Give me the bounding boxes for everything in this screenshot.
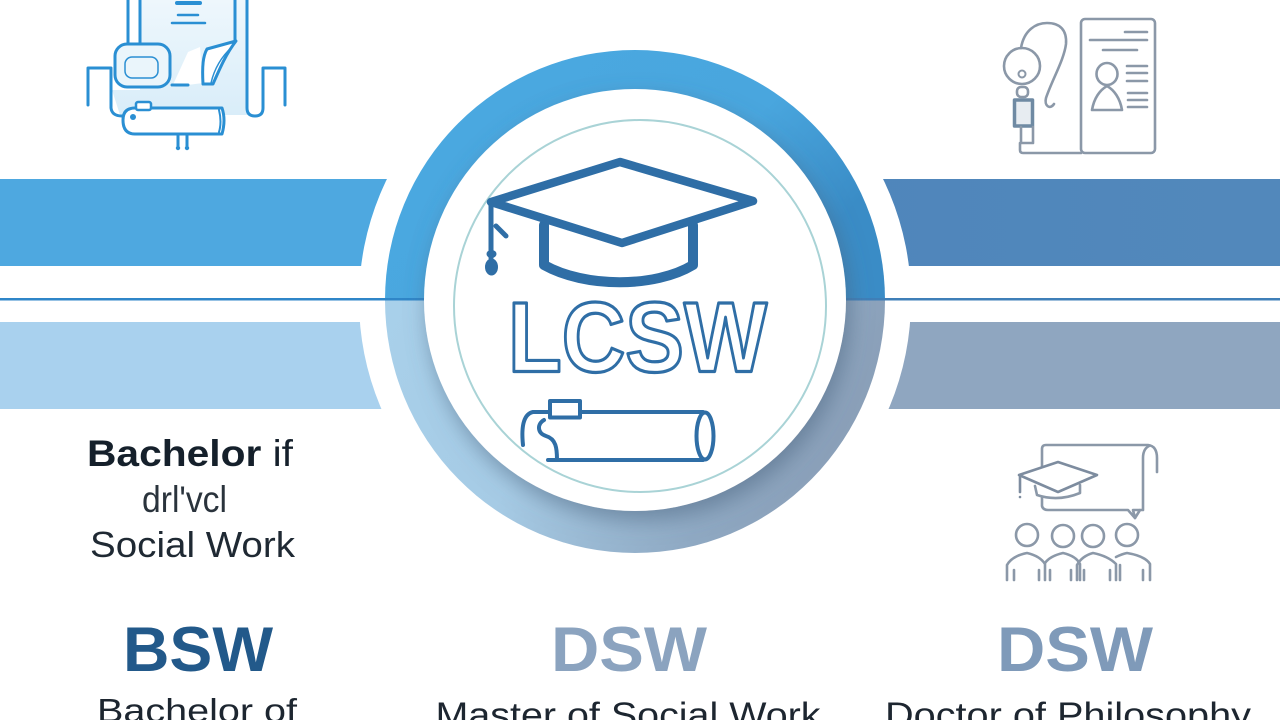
text: Bachelor if drifted Social Work — [87, 433, 296, 565]
central white disc — [424, 89, 846, 511]
degree label: BSW: BSW — [123, 615, 274, 685]
audience — [1007, 524, 1150, 580]
connector line — [0, 298, 1280, 300]
central outer ring — [385, 50, 885, 553]
icon: top right bulb and profile document — [1004, 19, 1155, 153]
text: Bachelor if drifted Social Work: Bachelor if — [87, 433, 294, 474]
white halo — [359, 24, 911, 576]
icon: graduation cap — [485, 162, 753, 282]
text: Bachelor if drifted Social Work: drl'vcl — [142, 479, 227, 520]
icon: top left documents and diploma — [88, 0, 285, 150]
LCSW outlined label: LCSW — [508, 282, 767, 392]
bar: bottom left — [0, 322, 420, 409]
inner thin ring — [454, 120, 826, 492]
icon: bottom right cap and audience — [1007, 445, 1157, 580]
bar: top right — [850, 179, 1280, 266]
bar: top left — [0, 179, 420, 266]
degree label: DSW middle: DSW — [551, 615, 708, 685]
text: Bachelor if drifted Social Work: Social Work — [90, 524, 296, 565]
bar: bottom right — [850, 322, 1280, 409]
icon: scroll — [522, 401, 714, 460]
degree label: DSW right: DSW — [997, 615, 1154, 685]
